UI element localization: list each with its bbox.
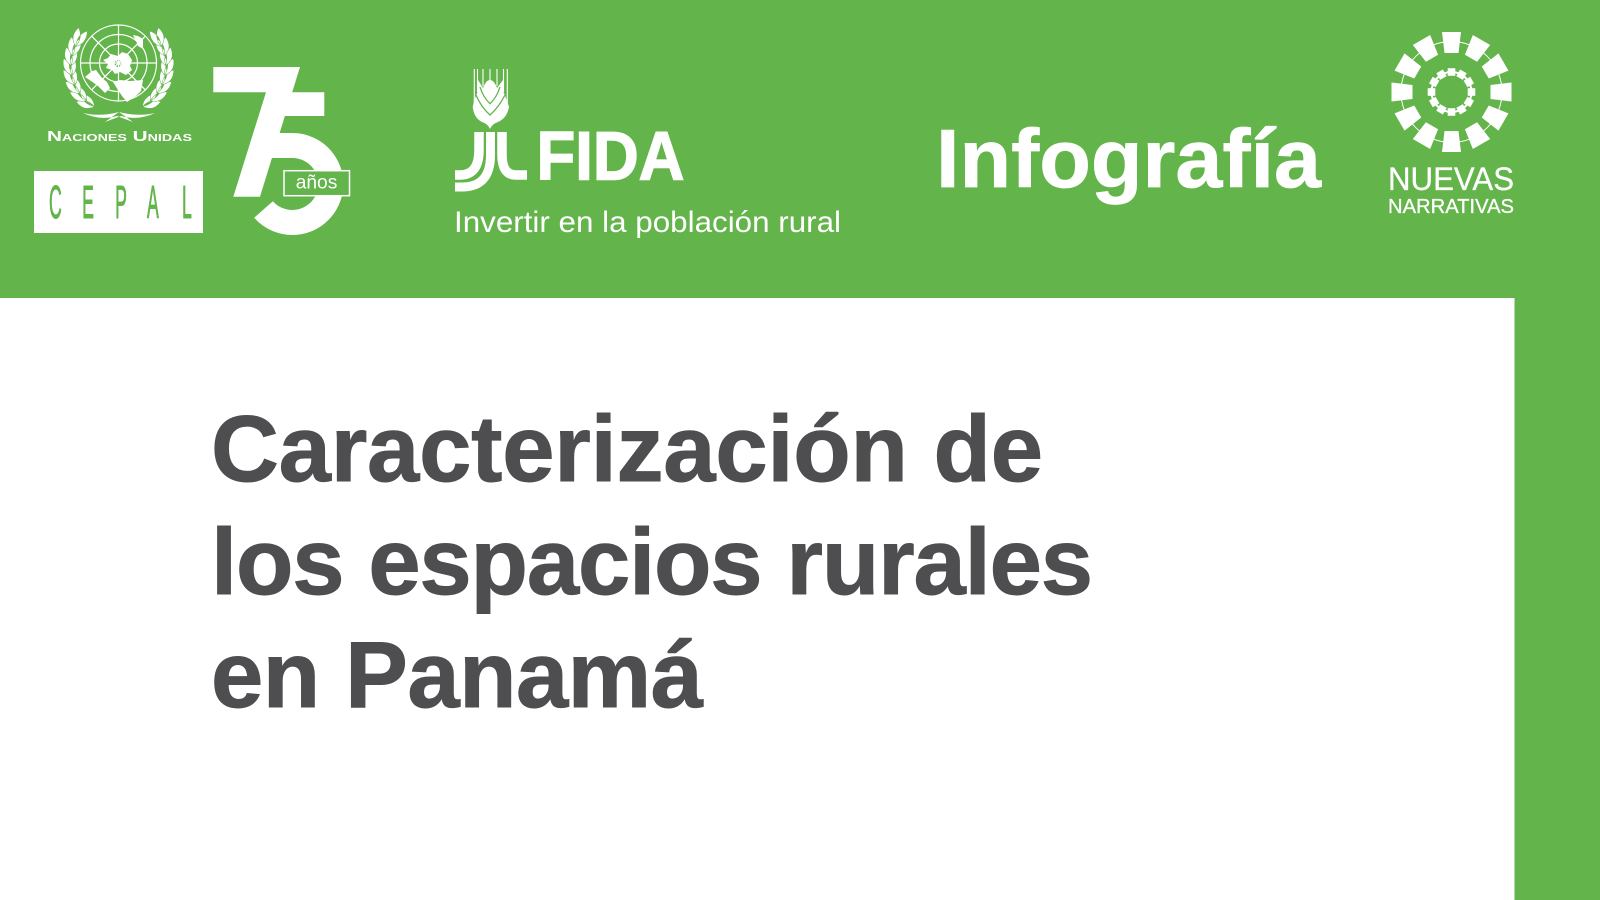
title: en Panamá bbox=[211, 622, 704, 727]
icon: outer ring of blocks bbox=[1392, 32, 1512, 152]
globe continents bbox=[85, 35, 143, 102]
left wreath bbox=[62, 26, 97, 113]
FIDA tagline: Invertir en la población rural bbox=[454, 206, 841, 239]
años badge: años bbox=[296, 172, 337, 193]
FIDA logo bbox=[454, 69, 841, 239]
años badge bbox=[284, 171, 350, 196]
75 años anniversary logo bbox=[213, 67, 350, 222]
CEPAL box bbox=[34, 171, 203, 233]
globe grid bbox=[80, 25, 156, 101]
CEPAL logo bbox=[34, 171, 203, 233]
title: Caracterización de bbox=[211, 396, 1043, 501]
numeral 7 bbox=[213, 67, 300, 197]
right wreath bbox=[140, 26, 175, 113]
heading: Infografía: Infografía bbox=[936, 112, 1322, 205]
title: los espacios rurales bbox=[211, 509, 1093, 614]
FIDA wordmark: FIDA bbox=[536, 118, 684, 194]
numeral 5 bbox=[264, 92, 331, 222]
white content panel bbox=[0, 298, 1514, 900]
crossed wreath stems bbox=[83, 112, 155, 122]
CEPAL letters: CEPAL bbox=[49, 177, 192, 229]
Nuevas Narrativas logo bbox=[1388, 32, 1514, 218]
Naciones Unidas label: Naciones Unidas bbox=[47, 129, 192, 145]
title bbox=[211, 396, 1093, 727]
Narrativas wordmark: NARRATIVAS bbox=[1388, 196, 1514, 218]
Nuevas wordmark: NUEVAS bbox=[1388, 161, 1514, 197]
icon: inner ring of squares bbox=[1428, 68, 1475, 116]
icon: United Nations emblem bbox=[62, 25, 175, 122]
icon: wheat ear bbox=[473, 69, 509, 129]
icon: FIDA hands stripes bbox=[455, 132, 527, 187]
